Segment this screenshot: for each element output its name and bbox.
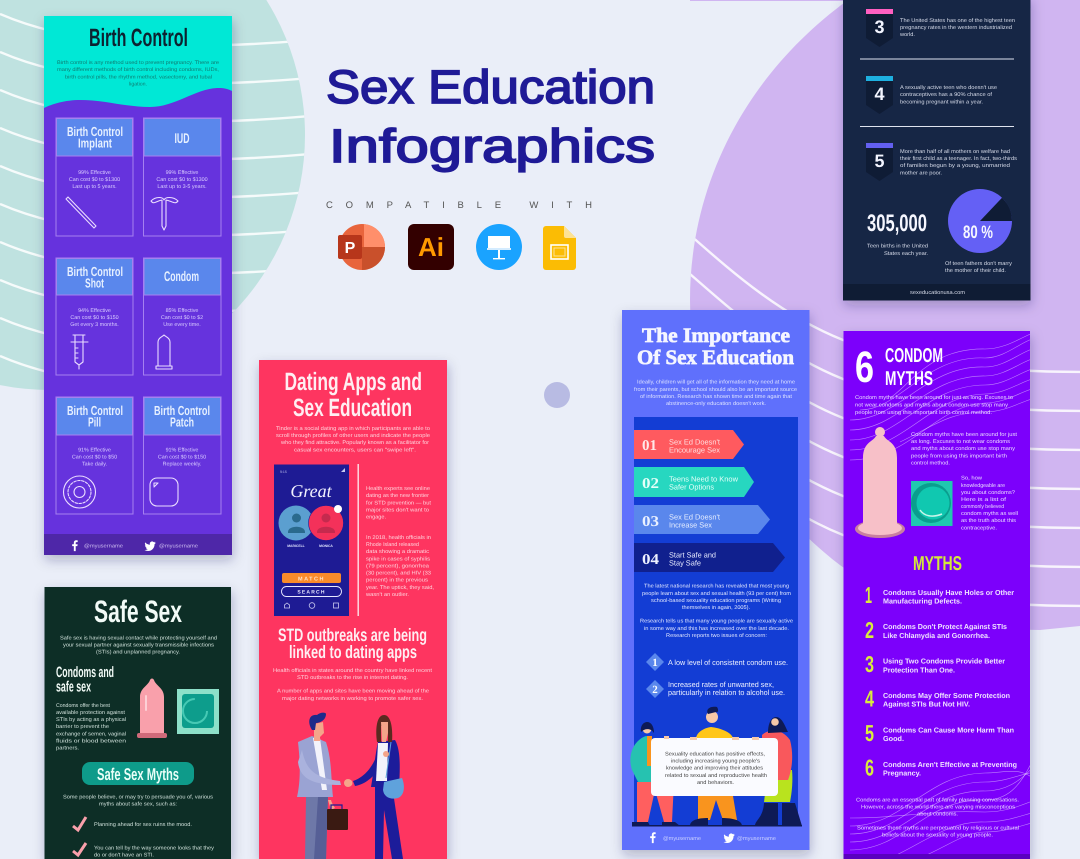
big number: 6 (855, 343, 874, 392)
myth 6 (865, 754, 1017, 780)
icon: Illustrator: Ai (418, 232, 444, 262)
text block: Here is a list of (961, 497, 1007, 503)
panel: Dating Apps (259, 360, 447, 859)
heading: Safe Sex (94, 594, 183, 629)
pie caption (945, 261, 1012, 274)
outbreak text: major dating networks in working to promote safer sex. (282, 696, 423, 702)
phone mockup: 9:15 (280, 470, 287, 474)
card: patch: Replace weekly. (163, 462, 201, 468)
main title: Infographics (329, 119, 655, 172)
issue 2: 2 (652, 684, 658, 696)
icon: facebook (650, 832, 656, 843)
big stat (867, 210, 928, 257)
intro text (855, 395, 1013, 416)
condom text (56, 703, 126, 752)
stat 5: mother are poor. (900, 170, 942, 176)
stat 4 (866, 76, 997, 114)
condom text: STIs by acting as a physical (56, 717, 126, 723)
icon: check 1 (73, 817, 86, 830)
intro text: birth control pills, the rhythm method, vasectomy, and tubal (65, 74, 212, 80)
sign text: knowledge and improving their attitudes (666, 766, 763, 772)
intro text (276, 426, 430, 454)
intro text: Tinder is a social dating app in which participants are able to (276, 426, 430, 432)
footer social (650, 832, 776, 843)
issue 2: particularly in relation to alcohol use. (668, 688, 785, 697)
background purple shape (690, 0, 1080, 630)
icon: large condom (855, 427, 905, 538)
intro text (634, 380, 797, 407)
intro text: abstinence-only education doesn't work. (666, 401, 766, 407)
stat 3: The United States has one of the highest teen (900, 18, 1015, 24)
myth 2: Like Chlamydia and Gonorrhea. (883, 631, 990, 640)
condom text: fluids or blood between (56, 738, 126, 744)
research text: The latest national research has revealed that most young (644, 584, 789, 590)
big stat: 305,000 (867, 210, 927, 237)
panel: teen pregnancy stats (843, 0, 1030, 300)
text block: So, how (961, 476, 982, 482)
condom text: partners. (56, 746, 79, 752)
text block: commonly believed (961, 504, 1004, 510)
arrow 01: 01 (642, 438, 657, 454)
card: pill: Can cost $0 to $50 (72, 454, 117, 460)
icon: twitter (724, 833, 735, 843)
pie chart (948, 189, 1012, 253)
stat 5 (866, 143, 1017, 181)
closing text: Sometimes these myths are perpetuated by religious or cultural (857, 826, 1019, 832)
closing text: about condoms. (917, 812, 958, 818)
side text: Rhode Island released (366, 542, 419, 548)
stat 4: contraceptives has a 90% chance of (900, 92, 993, 98)
text block: people from using this important birth (911, 454, 1007, 460)
myth 1: 1 (865, 582, 872, 608)
card: condom (144, 258, 221, 375)
myth 2 (94, 846, 214, 858)
stat 5: their first child as a teenager. In fact, two-thirds (900, 156, 1017, 162)
research text (640, 584, 793, 639)
intro text: not wear condoms and myths about condom use stop many (855, 402, 1008, 408)
footer bar (844, 854, 1030, 859)
myth 3 (865, 651, 1005, 677)
heading (284, 368, 422, 422)
button: safe sex myths: Safe Sex Myths (97, 765, 179, 784)
heading: Of Sex Education (637, 347, 795, 369)
text block: control method. (911, 460, 950, 466)
myth 4: 4 (865, 686, 874, 712)
myth 2: do or don't have an STI. (94, 852, 154, 858)
subheading: STD outbreaks are being (278, 625, 427, 645)
myth 5: Good. (883, 734, 904, 743)
footer: sexeducationusa.com (910, 290, 966, 296)
outbreak text: Health officials in states around the country have linked recent (273, 668, 433, 674)
big stat: States each year. (884, 251, 928, 257)
myths intro (63, 794, 213, 808)
card: pill: 91% Effective (78, 448, 111, 454)
search button (282, 586, 342, 596)
pie caption: the mother of their child. (945, 268, 1006, 274)
stat 5: 5 (874, 151, 885, 171)
condom text: Condoms offer the best (56, 703, 110, 709)
heading: Dating Apps and (284, 368, 422, 396)
arrow 04: Start Safe and (669, 550, 716, 560)
header wave (44, 16, 232, 108)
icon: facebook (72, 540, 78, 551)
arrow 02 (634, 467, 754, 497)
myth 4 (865, 686, 1010, 712)
panel: 6 Condom Myths (844, 331, 1035, 859)
myth 3: 3 (865, 651, 874, 677)
intro text: from their parents, but school should also be an important source (634, 387, 797, 393)
card: pill: Birth Control (67, 403, 123, 418)
pie caption: Of teen fathers don't marry (945, 261, 1012, 267)
outbreak text (273, 668, 433, 702)
subheading (56, 664, 114, 696)
subheading: myths: MYTHS (913, 553, 962, 575)
intro text: of information. Research has shown time and time again that (640, 394, 793, 400)
side text: wasn't an outlier. (365, 592, 409, 598)
background teal circle (0, 0, 310, 390)
side text: data showing a dramatic (366, 549, 429, 555)
icon: packet (911, 481, 952, 526)
myths intro: Some people believe, or may try to persuade you of, various (63, 794, 213, 800)
search button: SEARCH (297, 590, 326, 596)
illustration: woman with bag (346, 715, 404, 859)
footer bar (44, 534, 232, 555)
card: shot: Get every 3 months. (70, 322, 119, 328)
heading: The Importance (642, 325, 790, 347)
issue 1: A low level of consistent condom use. (668, 658, 788, 667)
match 1 avatar: MARICELL (287, 544, 305, 548)
text block: knowledgeable are (961, 483, 1005, 489)
footer (843, 284, 1030, 300)
intro text: casual sex encounters, users can "swipe left". (294, 448, 416, 454)
closing text (856, 798, 1019, 838)
main title (326, 60, 655, 172)
main title: Sex Education (326, 60, 655, 113)
side text: Health experts see online (366, 486, 430, 492)
panel: Safe Sex (44, 587, 231, 859)
stat 4: A sexually active teen who doesn't use (900, 85, 997, 91)
card: implant: Can cost $0 to $1300 (69, 177, 120, 183)
card: implant: Implant (78, 136, 112, 150)
icon: Keynote (476, 224, 522, 270)
myth 5: Condoms Can Cause More Harm Than (883, 726, 1014, 734)
arrow 03: Increase Sex (669, 520, 712, 530)
issue 1: 1 (652, 657, 658, 669)
icon: Google Slides (543, 226, 576, 270)
card: pill: Pill (88, 414, 101, 430)
arrow 02: Teens Need to Know (669, 474, 739, 484)
intro text (57, 60, 219, 88)
card: shot: Can cost $0 to $150 (70, 315, 119, 321)
stat 3: pregnancy rates in the western industrialized (900, 25, 1012, 31)
condom text: available protection against (56, 710, 126, 716)
phone mockup: Great (290, 481, 333, 501)
subheading: safe sex (56, 678, 91, 696)
pie chart: 80 % (963, 222, 993, 242)
match 1 avatar (278, 506, 314, 548)
myth 3: Using Two Condoms Provide Better (883, 656, 1005, 666)
wave pattern (850, 332, 1035, 858)
issue 1 (646, 653, 788, 671)
arrow 03 (634, 505, 770, 534)
card: patch: 91% Effective (166, 448, 198, 454)
research text: themselves in again, 2005). (682, 605, 750, 611)
card: implant: 99% Effective (78, 170, 111, 176)
myth 5 (865, 720, 1014, 746)
intro text: Safe sex is having sexual contact while protecting yourself and (60, 636, 217, 642)
phone nav icons (284, 603, 338, 608)
side text: engage. (366, 514, 386, 520)
outbreak text: A number of apps and sites have been moving ahead of the (277, 688, 429, 694)
myth 1: Manufacturing Defects. (883, 596, 962, 606)
research text: Research tells us that many young people are sexually active (640, 618, 793, 624)
arrow 03: 03 (642, 514, 659, 530)
intro text: scroll through profiles of other users and indicate the people (276, 433, 430, 439)
stat 3 (866, 9, 1015, 47)
card: shot (56, 258, 133, 375)
sign text: related to sexual and reproductive health (665, 773, 767, 779)
myths intro: myths about safe sex, such as: (99, 802, 177, 808)
card: patch: Birth Control (154, 403, 210, 418)
icon: twitter (144, 541, 156, 551)
side text (365, 486, 435, 598)
arrow 01: Encourage Sex (669, 446, 720, 454)
text block: you about condoms? (961, 490, 1015, 496)
side text: dating as the new frontier (366, 493, 429, 499)
icon: PowerPoint (338, 224, 385, 270)
card: IUD: 99% Effective (166, 170, 198, 176)
side text: percent) in the previous (366, 578, 428, 584)
myth list (865, 582, 1017, 780)
match 2 avatar (308, 505, 344, 548)
side text: for STD prevention — but (366, 500, 432, 506)
left person (630, 722, 680, 826)
text block: Condom myths have been around for just (911, 432, 1018, 438)
heading: Birth Control (89, 24, 188, 52)
myth 4: Condoms May Offer Some Protection (883, 691, 1010, 700)
condom text: barrier to prevent the (56, 724, 109, 730)
myth 6: 6 (865, 754, 874, 780)
intro text (60, 636, 217, 656)
intro text: who they find attractive. Popularly known as a facilitator for (280, 440, 429, 446)
sign text: and behaviors. (697, 780, 734, 786)
panel: Birth Control (44, 16, 232, 555)
card: IUD: Can cost $0 to $1300 (156, 177, 208, 183)
footer bar: @myusername (159, 544, 198, 550)
intro text: ligation. (129, 82, 147, 88)
intro text: people from using this important birth control method. (855, 410, 992, 416)
arrow 01: Sex Ed Doesn't (669, 438, 721, 446)
arrow 01 (634, 430, 744, 459)
myth 2: Condoms Don't Protect Against STIs (883, 622, 1007, 631)
side text: major sites don't want to (366, 508, 429, 514)
footer bar: @myusername (84, 544, 123, 550)
card: IUD (144, 118, 221, 236)
outbreak text: STD outbreaks to the rise in internet dating. (297, 675, 408, 681)
arrow 02: Safer Options (669, 482, 714, 492)
card: condom: Condom (164, 268, 199, 284)
myth 1: Planning ahead for sex ruins the mood. (94, 822, 192, 828)
text block: as the truth about this (961, 518, 1016, 524)
research text: in some way and this has increased over the last decade. (644, 626, 789, 632)
intro text: Condom myths have been around for just as long. Excuses to (855, 395, 1013, 401)
card: implant: Last up to 5 years. (72, 184, 117, 190)
icon: check 2 (73, 843, 86, 855)
card: condom: Can cost $0 to $2 (161, 315, 203, 321)
text block: and myths about condom use stop many (911, 446, 1015, 452)
subheading (278, 625, 427, 662)
match button: MATCH (298, 576, 325, 582)
card: pill (56, 397, 133, 514)
closing text: beliefs about the sexuality of young people. (882, 832, 993, 838)
stat 4: becoming pregnant within a year. (900, 100, 983, 106)
arrow 04 (634, 543, 785, 572)
icon: PowerPoint: P (345, 240, 356, 257)
closing text: Condoms are an essential part of family planning conversations. (856, 798, 1019, 804)
side text: spike in cases of syphilis (366, 556, 430, 562)
button: safe sex myths (82, 762, 194, 785)
arrow 04: Stay Safe (669, 558, 701, 568)
hands (664, 736, 759, 740)
issue 2 (646, 680, 785, 698)
stat 5: More than half of all mothers on welfare had (900, 149, 1010, 155)
myth 4: Against STIs But Not HIV. (883, 700, 970, 708)
arrow 04: 04 (642, 552, 660, 568)
heading (637, 325, 795, 369)
text block (961, 476, 1018, 532)
text block (911, 432, 1018, 466)
icon: Illustrator (408, 224, 454, 270)
card: pill: Take daily. (82, 462, 107, 468)
stat 3: 3 (874, 17, 885, 37)
card: patch (144, 397, 221, 514)
card: implant: Birth Control (67, 124, 123, 139)
icon: condom packet (177, 689, 219, 734)
issue 2: Increased rates of unwanted sex, (668, 680, 774, 689)
text block: contraceptive. (961, 526, 997, 532)
side text: year. The uptick, they said, (366, 585, 435, 591)
card: patch: Can cost $0 to $150 (158, 454, 206, 460)
side text: (79 percent), gonorrhea (366, 564, 429, 570)
heading: MYTHS (885, 368, 933, 390)
footer social: @myusername (737, 836, 776, 842)
footer social: @myusername (663, 836, 701, 842)
illustration: man with briefcase (297, 713, 352, 859)
card: patch: Patch (170, 414, 194, 430)
closing text: However, across the world there are varying misconceptions (861, 804, 1015, 810)
condom text: exchange of semen, vaginal (56, 732, 126, 738)
stat 5: of families begun by a young, unmarried (900, 163, 1010, 169)
myth 1: Condoms Usually Have Holes or Other (883, 588, 1014, 597)
compatible with label: COMPATIBLE WITH (326, 200, 592, 211)
phone mockup (274, 464, 349, 616)
icon: condom (137, 678, 167, 738)
card: shot: Birth Control (67, 264, 123, 279)
center person (690, 707, 742, 826)
divider (358, 464, 359, 616)
card: condom: Use every time. (163, 322, 201, 328)
research text: people learn about sex and sexual health (93 per cent) from (642, 591, 792, 597)
illustration: people holding sign (630, 707, 802, 826)
sign card (651, 738, 778, 796)
arrow 03: Sex Ed Doesn't (669, 512, 721, 522)
match button (282, 573, 341, 583)
heading: CONDOM (885, 345, 943, 367)
arrow 02: 02 (642, 476, 659, 492)
side text: In 2018, health officials in (366, 535, 431, 541)
sign text: including increasing young people's (671, 758, 760, 764)
heading (885, 345, 943, 390)
myth 2: You can tell by the way someone looks that they (94, 846, 214, 852)
stat 3: world. (899, 32, 915, 38)
subheading: linked to dating apps (289, 642, 417, 662)
sign text: Sexuality education has positive effects, (665, 752, 766, 758)
match 2 avatar: MONICA (319, 544, 333, 548)
myth 6: Condoms Aren't Effective at Preventing (883, 760, 1017, 769)
panel: Importance of Sex Education (622, 310, 810, 850)
right person (755, 717, 802, 826)
decorative dot (544, 382, 570, 408)
stat 4: 4 (874, 84, 885, 104)
text block: as long. Excuses to not wear condoms (911, 439, 1010, 445)
text block: condom myths as well (961, 511, 1018, 517)
sign text (665, 752, 767, 786)
intro text: many different methods of birth control including condoms, IUDs, (57, 67, 219, 73)
myth 5: 5 (865, 720, 874, 746)
card: shot: Shot (85, 276, 104, 290)
subheading: Condoms and (56, 664, 114, 681)
card: implant (56, 118, 133, 236)
card: IUD: Last up to 3-5 years. (157, 184, 207, 190)
myth 1 (865, 582, 1014, 608)
research text: Research reports two issues of concern: (666, 633, 767, 639)
big stat: Teen births in the United (867, 244, 928, 250)
research text: school-based sexuality education programs (Writing (651, 598, 781, 604)
myth 6: Pregnancy. (883, 768, 921, 778)
side text: (30 percent), and HIV (33 (366, 570, 431, 576)
myth 3: Protection Than One. (883, 666, 955, 674)
myth 2: 2 (865, 617, 874, 643)
card: shot: 94% Effective (78, 308, 111, 314)
intro text: Birth control is any method used to prevent pregnancy. There are (57, 60, 219, 66)
intro text: (STIs) and unplanned pregnancy. (96, 650, 180, 656)
intro text: Ideally, children will get all of the information they need at home (637, 380, 795, 386)
myth 2 (865, 617, 1007, 643)
heading: Sex Education (293, 394, 412, 422)
card: condom: 85% Effective (166, 308, 198, 314)
intro text: your sexual partner against sexually transmissible infections (63, 642, 214, 648)
card: IUD: IUD (174, 130, 190, 146)
